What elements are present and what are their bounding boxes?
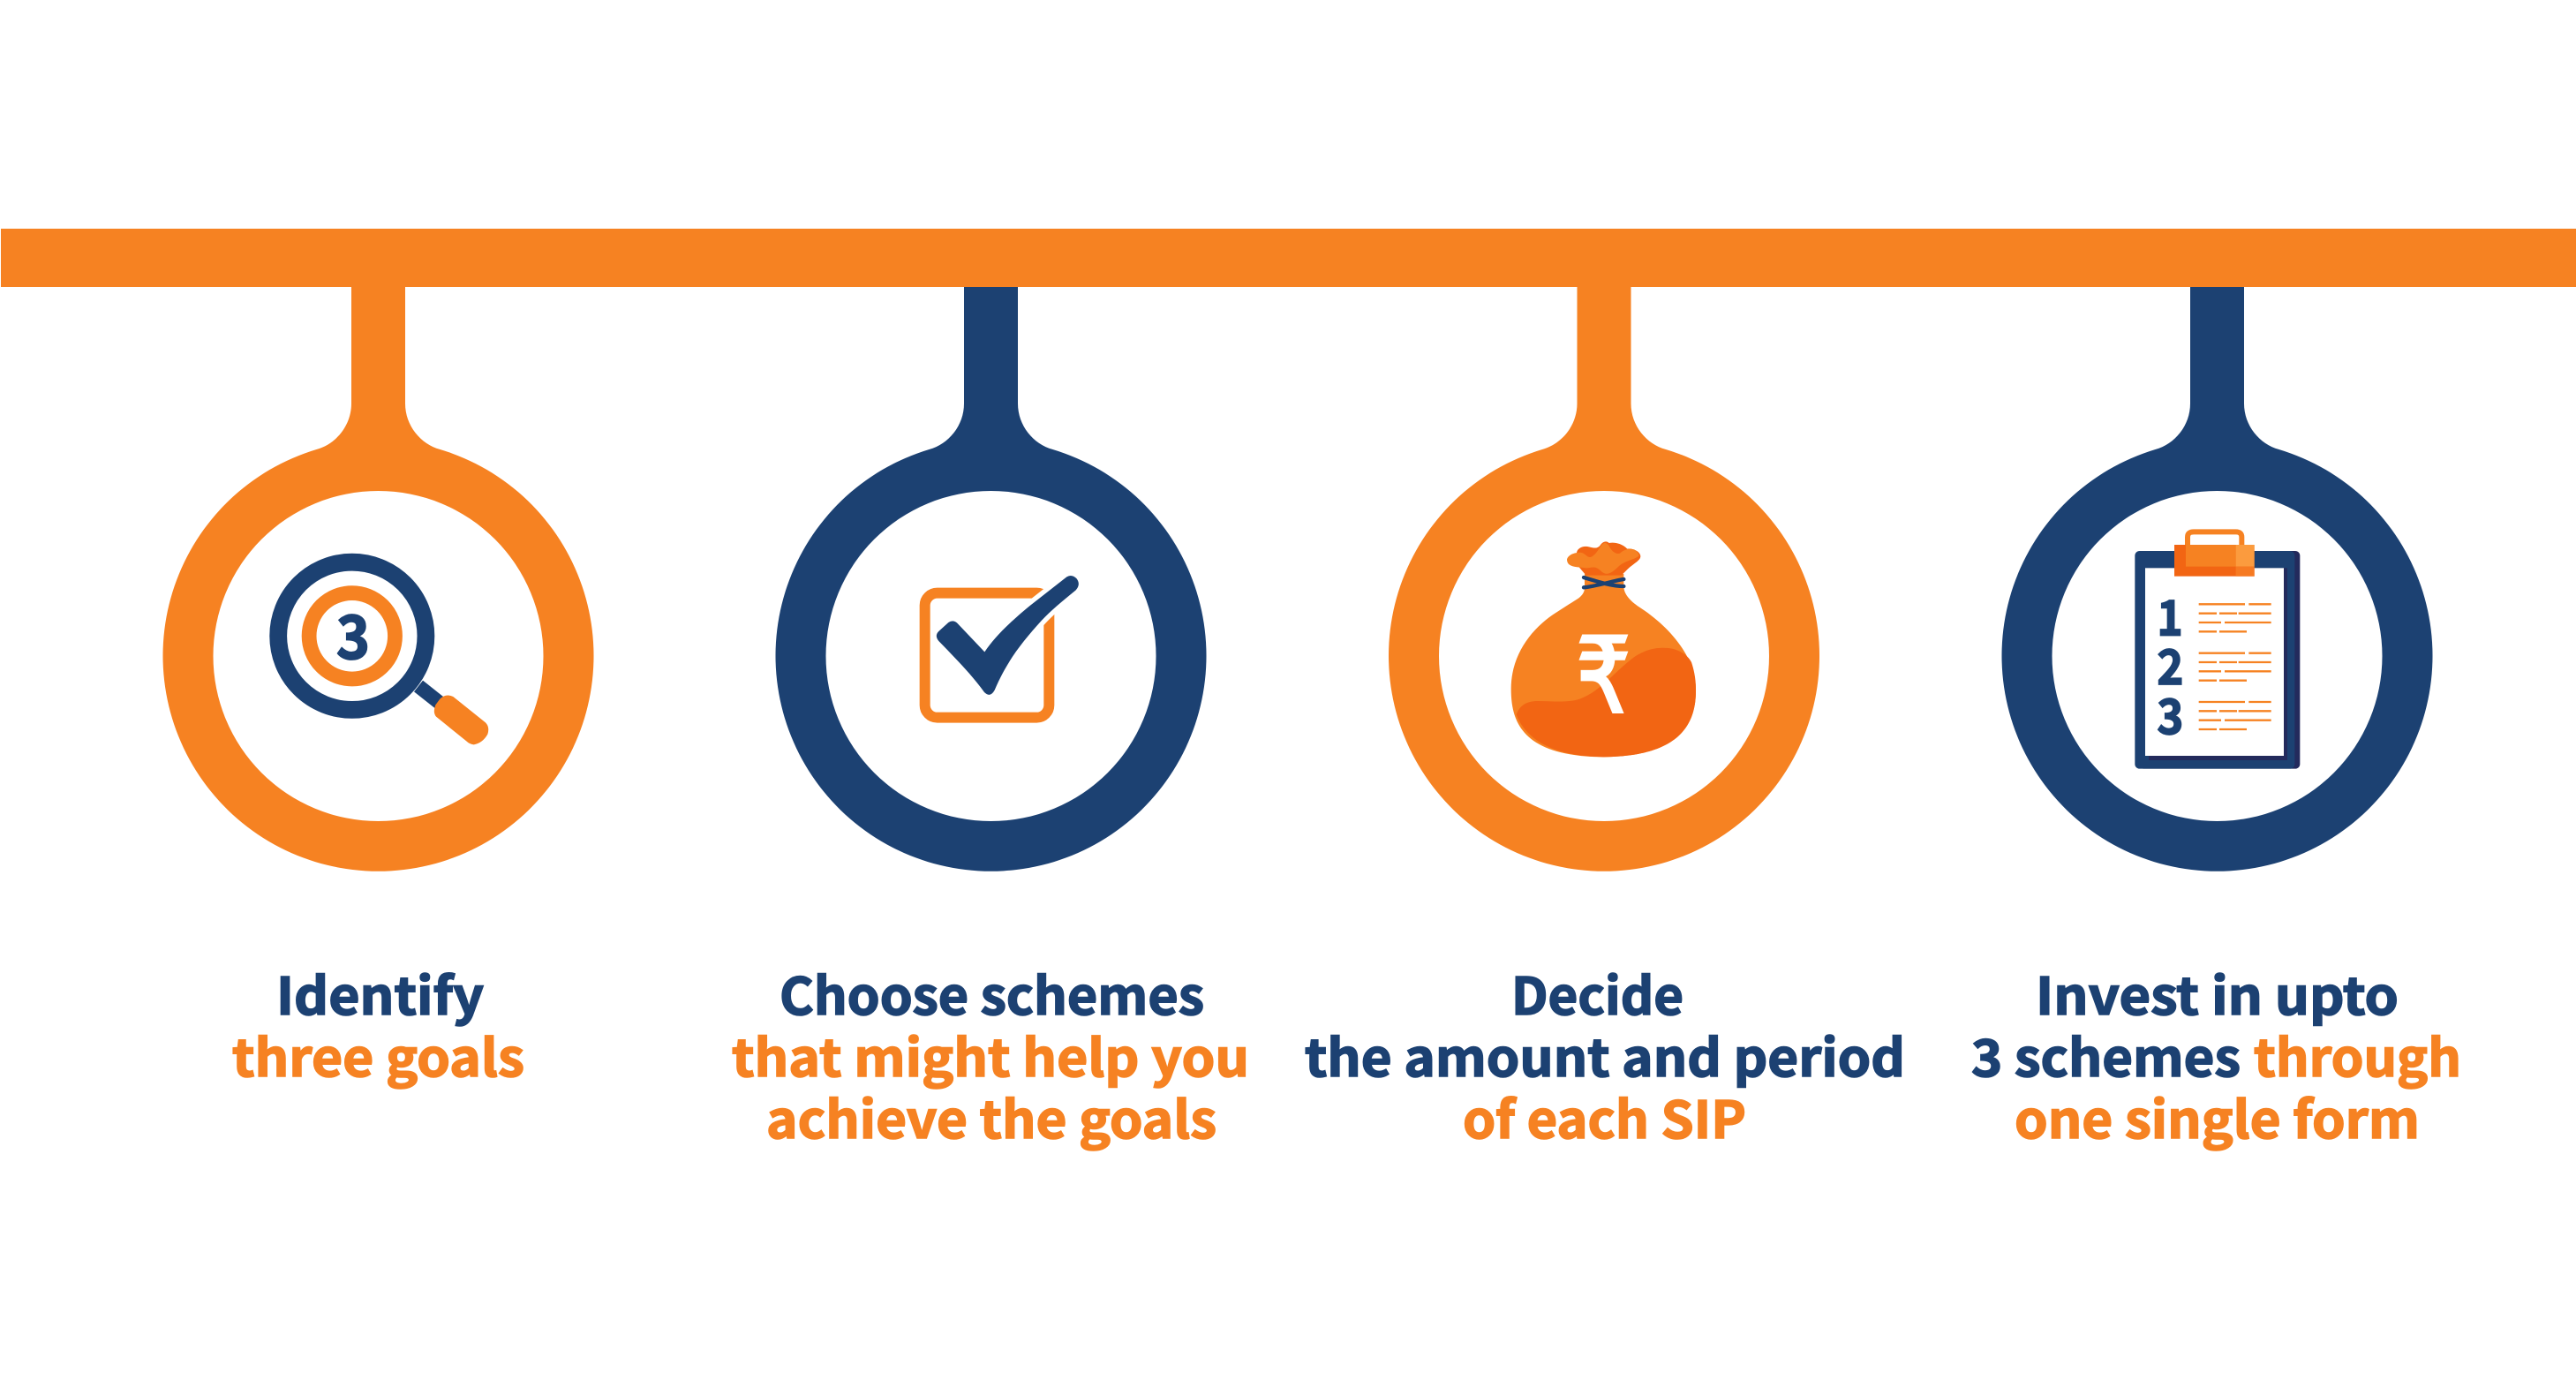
step 4 caption: through	[2254, 1017, 2461, 1091]
step 3 caption: the amount and period	[1305, 1017, 1905, 1091]
step 2 caption: Choose schemes	[780, 955, 1204, 1030]
step 3 caption	[1305, 955, 1905, 1153]
pendant ring: step 4	[2002, 283, 2433, 871]
icon: clipboard with numbered list: 3	[2157, 678, 2183, 748]
pendant ring: step 3	[1389, 283, 1819, 871]
pendant ring: step 1	[162, 283, 593, 871]
pendant ring: step 2	[775, 283, 1206, 871]
step 4 caption: one single form	[2015, 1079, 2420, 1153]
panel: step 2 choose schemes	[732, 283, 1249, 1153]
icon: money bag with rupee: ₹	[1576, 615, 1631, 736]
step 4 caption	[1971, 955, 2461, 1153]
icon: magnifier with target and number 3	[278, 562, 488, 744]
step 1 caption: three goals	[232, 1017, 524, 1091]
step 3 caption: of each SIP	[1463, 1079, 1746, 1153]
step 2 caption: achieve the goals	[766, 1079, 1216, 1153]
panel: step 3 decide amount	[1305, 283, 1905, 1153]
panel: step 4 invest	[1971, 283, 2461, 1153]
top horizontal bar	[1, 229, 2576, 287]
step 4 caption: Invest in upto	[2036, 955, 2399, 1030]
icon: clipboard with numbered list: 2	[2157, 629, 2183, 698]
step 3 caption: Decide	[1511, 955, 1683, 1030]
icon: money bag with rupee	[1511, 541, 1696, 757]
step 1 caption	[232, 955, 524, 1091]
icon: clipboard with numbered list: 1	[2157, 579, 2183, 649]
step 2 caption	[732, 955, 1249, 1153]
icon: clipboard with numbered list	[2135, 532, 2300, 769]
icon: magnifier with target and number 3: 3	[336, 589, 370, 676]
step 4 caption: 3 schemes	[1971, 1017, 2241, 1091]
step 1 caption: Identify	[276, 955, 484, 1030]
panel: step 1 identify goals	[162, 283, 593, 1091]
step 2 caption: that might help you	[732, 1017, 1249, 1091]
icon: checkbox with tick	[925, 576, 1079, 718]
